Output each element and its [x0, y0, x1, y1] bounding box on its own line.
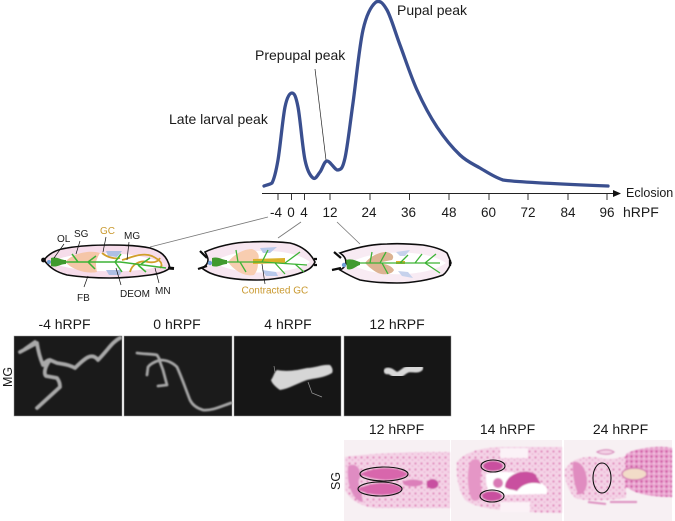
salivary gland — [228, 249, 259, 275]
axis tick labels: 60 — [481, 205, 496, 220]
label: Pupal peak: Pupal peak — [397, 2, 468, 18]
heading: 4 hRPF — [264, 316, 312, 332]
axis tick labels: 12 — [322, 205, 338, 220]
anatomy labels — [57, 226, 171, 304]
tissue section — [345, 452, 450, 508]
panel: MG -4 hRPF — [14, 316, 122, 416]
salivary gland — [65, 252, 100, 273]
heading: 12 hRPF — [369, 421, 424, 437]
body outline — [44, 245, 170, 278]
anatomy labels: OL — [57, 234, 71, 245]
mouth hooks and spiracles — [198, 251, 317, 269]
body outline — [340, 244, 451, 283]
axis tick labels: 96 — [599, 205, 615, 220]
axis tick labels: 4 — [300, 205, 308, 220]
axis label: Eclosion: Eclosion — [626, 186, 673, 200]
gastric caeca and midgut — [102, 253, 162, 272]
midgut — [396, 261, 405, 264]
SG row label: SG — [329, 472, 343, 490]
label leaders — [54, 237, 159, 287]
inner white area — [350, 252, 446, 274]
anatomy labels: SG — [74, 229, 89, 240]
central nervous system and trachea — [352, 252, 440, 274]
MG row label: MG — [1, 367, 15, 387]
blue muscle patches — [396, 250, 413, 278]
blue muscle patches — [106, 251, 122, 275]
central nervous system and trachea — [217, 250, 307, 274]
gut specimen — [137, 353, 231, 410]
axis tick labels: 72 — [520, 205, 536, 220]
leader: prepupal peak — [315, 69, 326, 160]
heading: 14 hRPF — [480, 421, 535, 437]
central nervous system and trachea — [56, 254, 166, 272]
axis tick labels: -4 — [270, 205, 282, 220]
diagram: larva at 4 hRPF — [198, 242, 317, 296]
tissue section — [457, 447, 562, 513]
heading: -4 hRPF — [38, 316, 91, 332]
axis tick labels — [270, 205, 615, 220]
anatomy labels: MN — [155, 286, 171, 297]
diagram: larva at 12 hRPF — [332, 244, 451, 283]
contracted gut — [271, 365, 333, 390]
salivary gland — [365, 252, 394, 274]
panel: MG 4 hRPF — [234, 316, 341, 416]
axis tick labels: 36 — [401, 205, 416, 220]
anatomy labels: DEOM — [120, 289, 150, 300]
inner white area — [214, 251, 310, 272]
panel: MG 12 hRPF — [344, 316, 451, 416]
label: Contracted GC: Contracted GC — [242, 286, 308, 296]
contracted gut — [387, 368, 420, 375]
contracted gastric caeca and midgut — [253, 258, 285, 264]
body outline — [202, 242, 315, 280]
circled salivary gland — [593, 463, 611, 493]
label: Prepupal peak: Prepupal peak — [255, 47, 346, 63]
circled salivary glands — [360, 467, 408, 481]
anatomy labels: MG — [124, 231, 140, 242]
chart: hormone titer peaks over time — [169, 1, 673, 220]
mouth hooks and spiracles — [332, 252, 450, 270]
axis tick labels: 0 — [287, 205, 295, 220]
circled salivary glands — [481, 460, 505, 472]
axis unit: hRPF: hRPF — [623, 204, 659, 220]
tissue section — [565, 447, 672, 504]
curve: titer line — [264, 1, 608, 186]
heading: 12 hRPF — [369, 316, 425, 332]
axis tick labels: 24 — [361, 205, 377, 220]
panel: SG 24 hRPF — [564, 421, 672, 521]
anatomy labels: FB — [77, 293, 90, 304]
connectors from axis to larvae — [150, 217, 360, 247]
panel: SG 14 hRPF — [451, 421, 562, 521]
axis: time axis with arrow — [262, 190, 621, 200]
diagram: larva at -4 hRPF — [41, 226, 174, 304]
heading: 24 hRPF — [593, 421, 648, 437]
gut specimen — [20, 338, 120, 408]
label: Late larval peak: Late larval peak — [169, 111, 269, 127]
panel: MG 0 hRPF — [124, 316, 232, 416]
leader: contracted GC — [262, 264, 265, 284]
axis tick labels: 48 — [441, 205, 457, 220]
inner white area — [52, 253, 164, 271]
anatomy labels: GC — [100, 226, 115, 237]
blue muscle patches — [260, 247, 278, 276]
axis tick labels: 84 — [560, 205, 576, 220]
panel: SG 12 hRPF — [344, 421, 450, 521]
heading: 0 hRPF — [153, 316, 201, 332]
